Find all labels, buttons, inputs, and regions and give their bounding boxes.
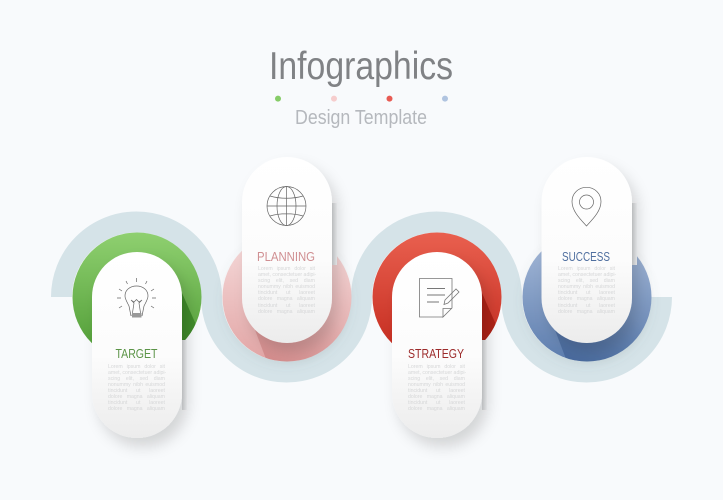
body text: strategy: amet, consectetuer adipi- [408, 370, 466, 376]
card: strategy [392, 252, 487, 438]
heading: success: SUCCESS [562, 250, 610, 264]
body text: target: Lorem ipsum dolor sit [108, 364, 165, 370]
body text: target: tincidunt ut laoreet [108, 400, 165, 406]
body text: target: nonummy nibh euismod [108, 382, 165, 388]
circle: pink [222, 251, 352, 362]
card: success [542, 157, 637, 343]
body text: target: tincidunt ut laoreet [108, 388, 165, 394]
body text: strategy: tincidunt ut laoreet [408, 388, 465, 394]
title: Infographics [269, 45, 453, 88]
body text: success: scing elit, sed diam [558, 278, 615, 284]
card: target [92, 252, 187, 438]
card: planning [242, 157, 337, 343]
circle: blue [522, 251, 652, 362]
body text: planning [258, 266, 316, 318]
body text: target: amet, consectetuer adipi- [108, 370, 166, 376]
body text: planning: nonummy nibh euismod [258, 284, 315, 290]
body text: success: tincidunt ut laoreet [558, 303, 615, 309]
wave track [62, 222, 662, 372]
body text: target: scing elit, sed diam [108, 376, 165, 382]
heading: planning: PLANNING [257, 250, 315, 264]
body text: planning: tincidunt ut laoreet [258, 303, 315, 309]
body text: planning: amet, consectetuer adipi- [258, 272, 316, 278]
icon: map pin [572, 187, 601, 226]
body text: strategy [408, 364, 466, 416]
body text: planning: tincidunt ut laoreet [258, 290, 315, 296]
body text: success: amet, consectetuer adipi- [558, 272, 616, 278]
body text: success: tincidunt ut laoreet [558, 290, 615, 296]
body text: strategy: nonummy nibh euismod [408, 382, 465, 388]
body text: strategy: dolore magna aliquam [408, 394, 465, 400]
body text: planning: scing elit, sed diam [258, 278, 315, 284]
body text: target: dolore magna aliquam [108, 406, 165, 412]
icon: light bulb [117, 278, 156, 318]
icon: document and pencil [420, 278, 459, 317]
body text: strategy: dolore magna aliquam [408, 406, 465, 412]
heading: target: TARGET [116, 347, 158, 361]
circle: green [72, 232, 202, 344]
body text: planning: dolore magna aliquam [258, 309, 315, 315]
palette dots [275, 96, 448, 102]
body text: target [108, 364, 166, 416]
body text: success: nonummy nibh euismod [558, 284, 615, 290]
icon: globe [267, 186, 306, 226]
circle: red [372, 232, 502, 344]
body text: planning: Lorem ipsum dolor sit [258, 266, 315, 272]
heading: strategy: STRATEGY [408, 347, 465, 361]
body text: success [558, 266, 616, 318]
body text: success: dolore magna aliquam [558, 309, 615, 315]
body text: success: Lorem ipsum dolor sit [558, 266, 615, 272]
body text: strategy: Lorem ipsum dolor sit [408, 364, 465, 370]
body text: strategy: tincidunt ut laoreet [408, 400, 465, 406]
body text: success: dolore magna aliquam [558, 296, 615, 302]
body text: planning: dolore magna aliquam [258, 296, 315, 302]
body text: strategy: scing elit, sed diam [408, 376, 465, 382]
subtitle: Design Template [295, 107, 427, 129]
body text: target: dolore magna aliquam [108, 394, 165, 400]
